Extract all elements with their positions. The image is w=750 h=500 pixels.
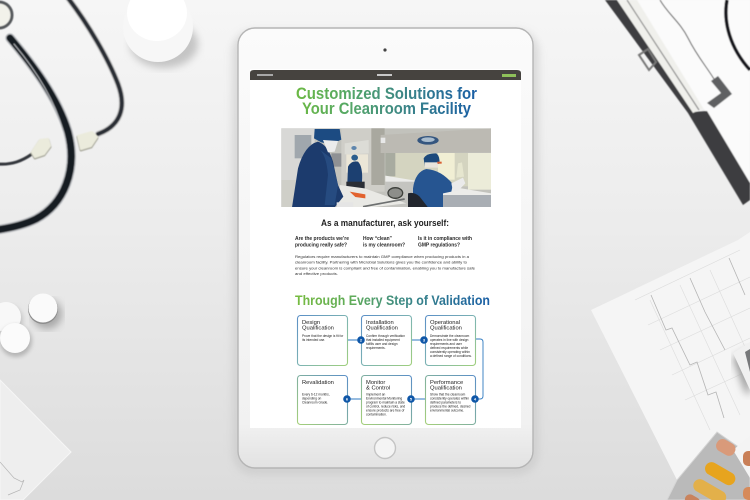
title: Customized Solutions for [296,85,478,103]
heading: ask yourself: As a manufacturer, ask yourself: [321,218,449,228]
step: performance qualification: defined parameters to [430,400,461,404]
step: operational qualification: Demonstrate the cleanroom [430,334,470,338]
step: performance qualification: Qualification [430,386,462,392]
process flow: 5 [410,396,413,402]
step: installation qualification: that installed equipment [366,338,400,342]
ECG paper bottom right [591,232,750,500]
step: operational qualification [426,316,476,366]
step: operational qualification: a defined range of conditions. [430,354,472,358]
step: monitor and control: contamination. [366,412,387,416]
step: operational qualification: Qualification [430,326,462,332]
step: revalidation: Revalidation [302,380,334,386]
step: installation qualification: Qualification [366,326,398,332]
tablet [232,28,539,475]
near left technician [292,142,343,207]
step: performance qualification: produce the defined, desired [430,404,471,408]
bench and gloves [338,185,406,207]
title: Your Cleanroom Facility [302,100,472,118]
step: design qualification: Prove that the design is fit for [302,334,344,338]
step: installation qualification: requirements. [366,346,386,350]
intro paragraph: ensure your cleanroom is compliant and free of contamination, enabling you to manufacture safe [295,266,476,270]
step: design qualification: Qualification [302,326,334,332]
questions: Is it in compliance with [418,236,472,242]
step: performance qualification: environmental outcome. [430,408,464,412]
step: monitor and control: ensure products are free of [366,408,404,412]
process flow: 6 [346,396,349,402]
stethoscope [0,0,122,230]
step: monitor and control: program to maintain a state [366,400,405,404]
tablet shadow [232,30,539,475]
step: revalidation: Every 6-12 months, [302,392,330,396]
step: revalidation: depending on [302,396,322,400]
step: operational qualification: requirements and user [430,342,463,346]
process flow [298,316,483,424]
questions [295,236,472,248]
questions: Are the products we’re [295,236,349,242]
step: monitor and control: & Control [366,386,390,392]
step: installation qualification: Confirm through verification [366,334,405,338]
step: performance qualification: consistently operates within [430,396,469,400]
questions: producing really safe? [295,242,347,248]
intro paragraph: Regulators require manufacturers to maintain GMP compliance when producing products in a [295,254,470,259]
white tablets [0,294,62,357]
camera [383,48,387,52]
title [296,85,478,118]
photo: cleanroom technicians [281,128,491,207]
step: operational qualification: Operational [430,320,460,326]
step: performance qualification: Performance [430,380,463,386]
step: monitor and control: of control, reduce risks, and [366,404,405,408]
step: monitor and control: Monitor [366,380,385,386]
home button [374,438,396,458]
ECG paper bottom left [0,380,71,500]
intro paragraph: cleanroom facility. Partnering with Microbial Solutions gives you the confidence and ability to [295,260,468,264]
connectors [347,339,483,399]
step: monitor and control [362,376,412,424]
status bar [250,70,521,80]
step: operational qualification: operates in line with design [430,338,469,342]
screen [250,69,521,428]
right technician [413,169,453,207]
process flow: 2 [360,338,363,342]
step: installation qualification: Installation [366,320,394,326]
step: monitor and control: Environmental Monitoring [366,396,402,400]
step: design qualification: its intended use. [302,338,325,342]
intro paragraph [295,254,476,276]
step: design qualification [298,316,348,366]
questions: is my cleanroom? [363,242,405,248]
step: performance qualification: Show that the cleanroom [430,392,466,396]
questions: GMP regulations? [418,242,460,248]
step: operational qualification: defined requirements while [430,346,468,350]
step: performance qualification [426,376,476,424]
step: design qualification: Design [302,320,320,326]
step: revalidation: Cleanroom Grade. [302,400,328,404]
pill blister packs [667,342,750,500]
intro paragraph: and effective products. [295,271,338,276]
capsules [703,460,738,488]
step: installation qualification: fulfills user and design [366,342,398,346]
heading: validation: Through Every Step of Validation [295,293,490,308]
hood [381,128,491,153]
far technician [347,161,362,182]
clipboard top right [605,0,750,205]
tablet body [238,28,533,468]
process flow: 3 [423,338,426,342]
ear tips [78,133,97,150]
step: revalidation [298,376,348,424]
pill bottle [123,0,198,68]
chest piece [0,2,12,28]
process flow: 4 [474,396,477,402]
step: operational qualification: consistently operating within [430,350,470,354]
step: monitor and control: Implement an [366,392,386,396]
step numbers [343,336,479,403]
questions: How “clean” [363,236,392,242]
step: installation qualification [362,316,412,366]
